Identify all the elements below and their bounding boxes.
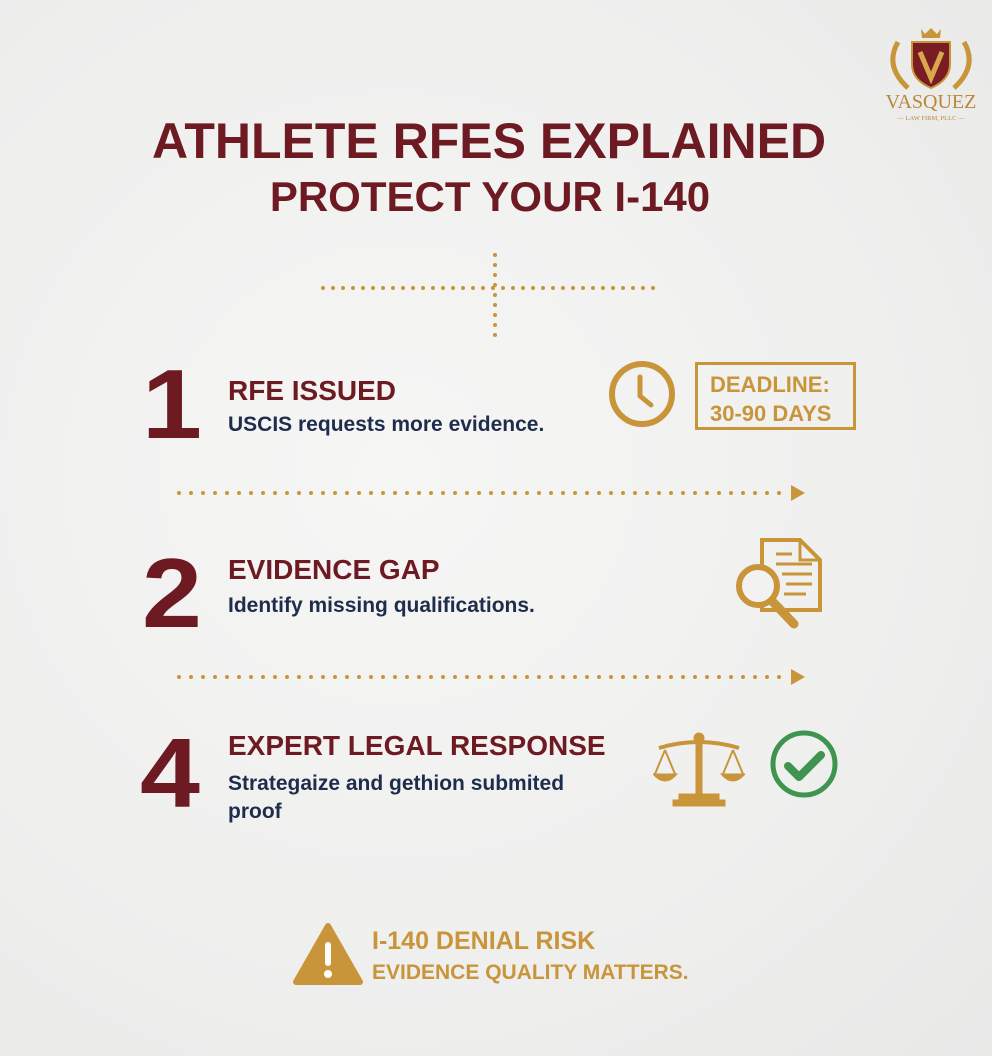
step 4: 4: [140, 718, 200, 828]
arrow 2: [177, 669, 805, 685]
icon: clock: [609, 361, 675, 427]
icon: warning triangle: [293, 923, 363, 985]
step 1: 1: [142, 349, 202, 459]
subtitle: PROTECT YOUR I-140: [270, 173, 710, 220]
step 2: [142, 538, 822, 648]
step 1: RFE ISSUED: [228, 375, 396, 406]
dotted cross divider: [321, 253, 655, 337]
icon: scales: [653, 732, 745, 806]
warning callout: I-140 DENIAL RISK: [372, 927, 595, 955]
step 4: proof: [228, 800, 282, 823]
step 1: [142, 349, 856, 459]
icon: green check: [770, 730, 838, 798]
arrow 1: [177, 485, 805, 501]
warning callout: EVIDENCE QUALITY MATTERS.: [372, 961, 689, 984]
title: ATHLETE RFES EXPLAINED: [152, 113, 826, 169]
step 2: EVIDENCE GAP: [228, 554, 440, 585]
step 4: EXPERT LEGAL RESPONSE: [228, 730, 606, 761]
step 2: Identify missing qualifications.: [228, 594, 535, 617]
callout: deadline: 30-90 DAYS: [710, 401, 831, 426]
logo: [886, 28, 976, 122]
step 2: 2: [142, 538, 202, 648]
logo: VASQUEZ: [886, 91, 976, 113]
logo: — LAW FIRM, PLLC —: [896, 115, 965, 122]
step 1: USCIS requests more evidence.: [228, 413, 544, 436]
callout: deadline: [695, 362, 856, 430]
warning callout: [293, 923, 689, 985]
icon: magnifier on document: [736, 538, 822, 628]
step 4: [140, 718, 838, 828]
callout: deadline: DEADLINE:: [710, 372, 830, 397]
step 4: Strategaize and gethion submited: [228, 772, 564, 795]
